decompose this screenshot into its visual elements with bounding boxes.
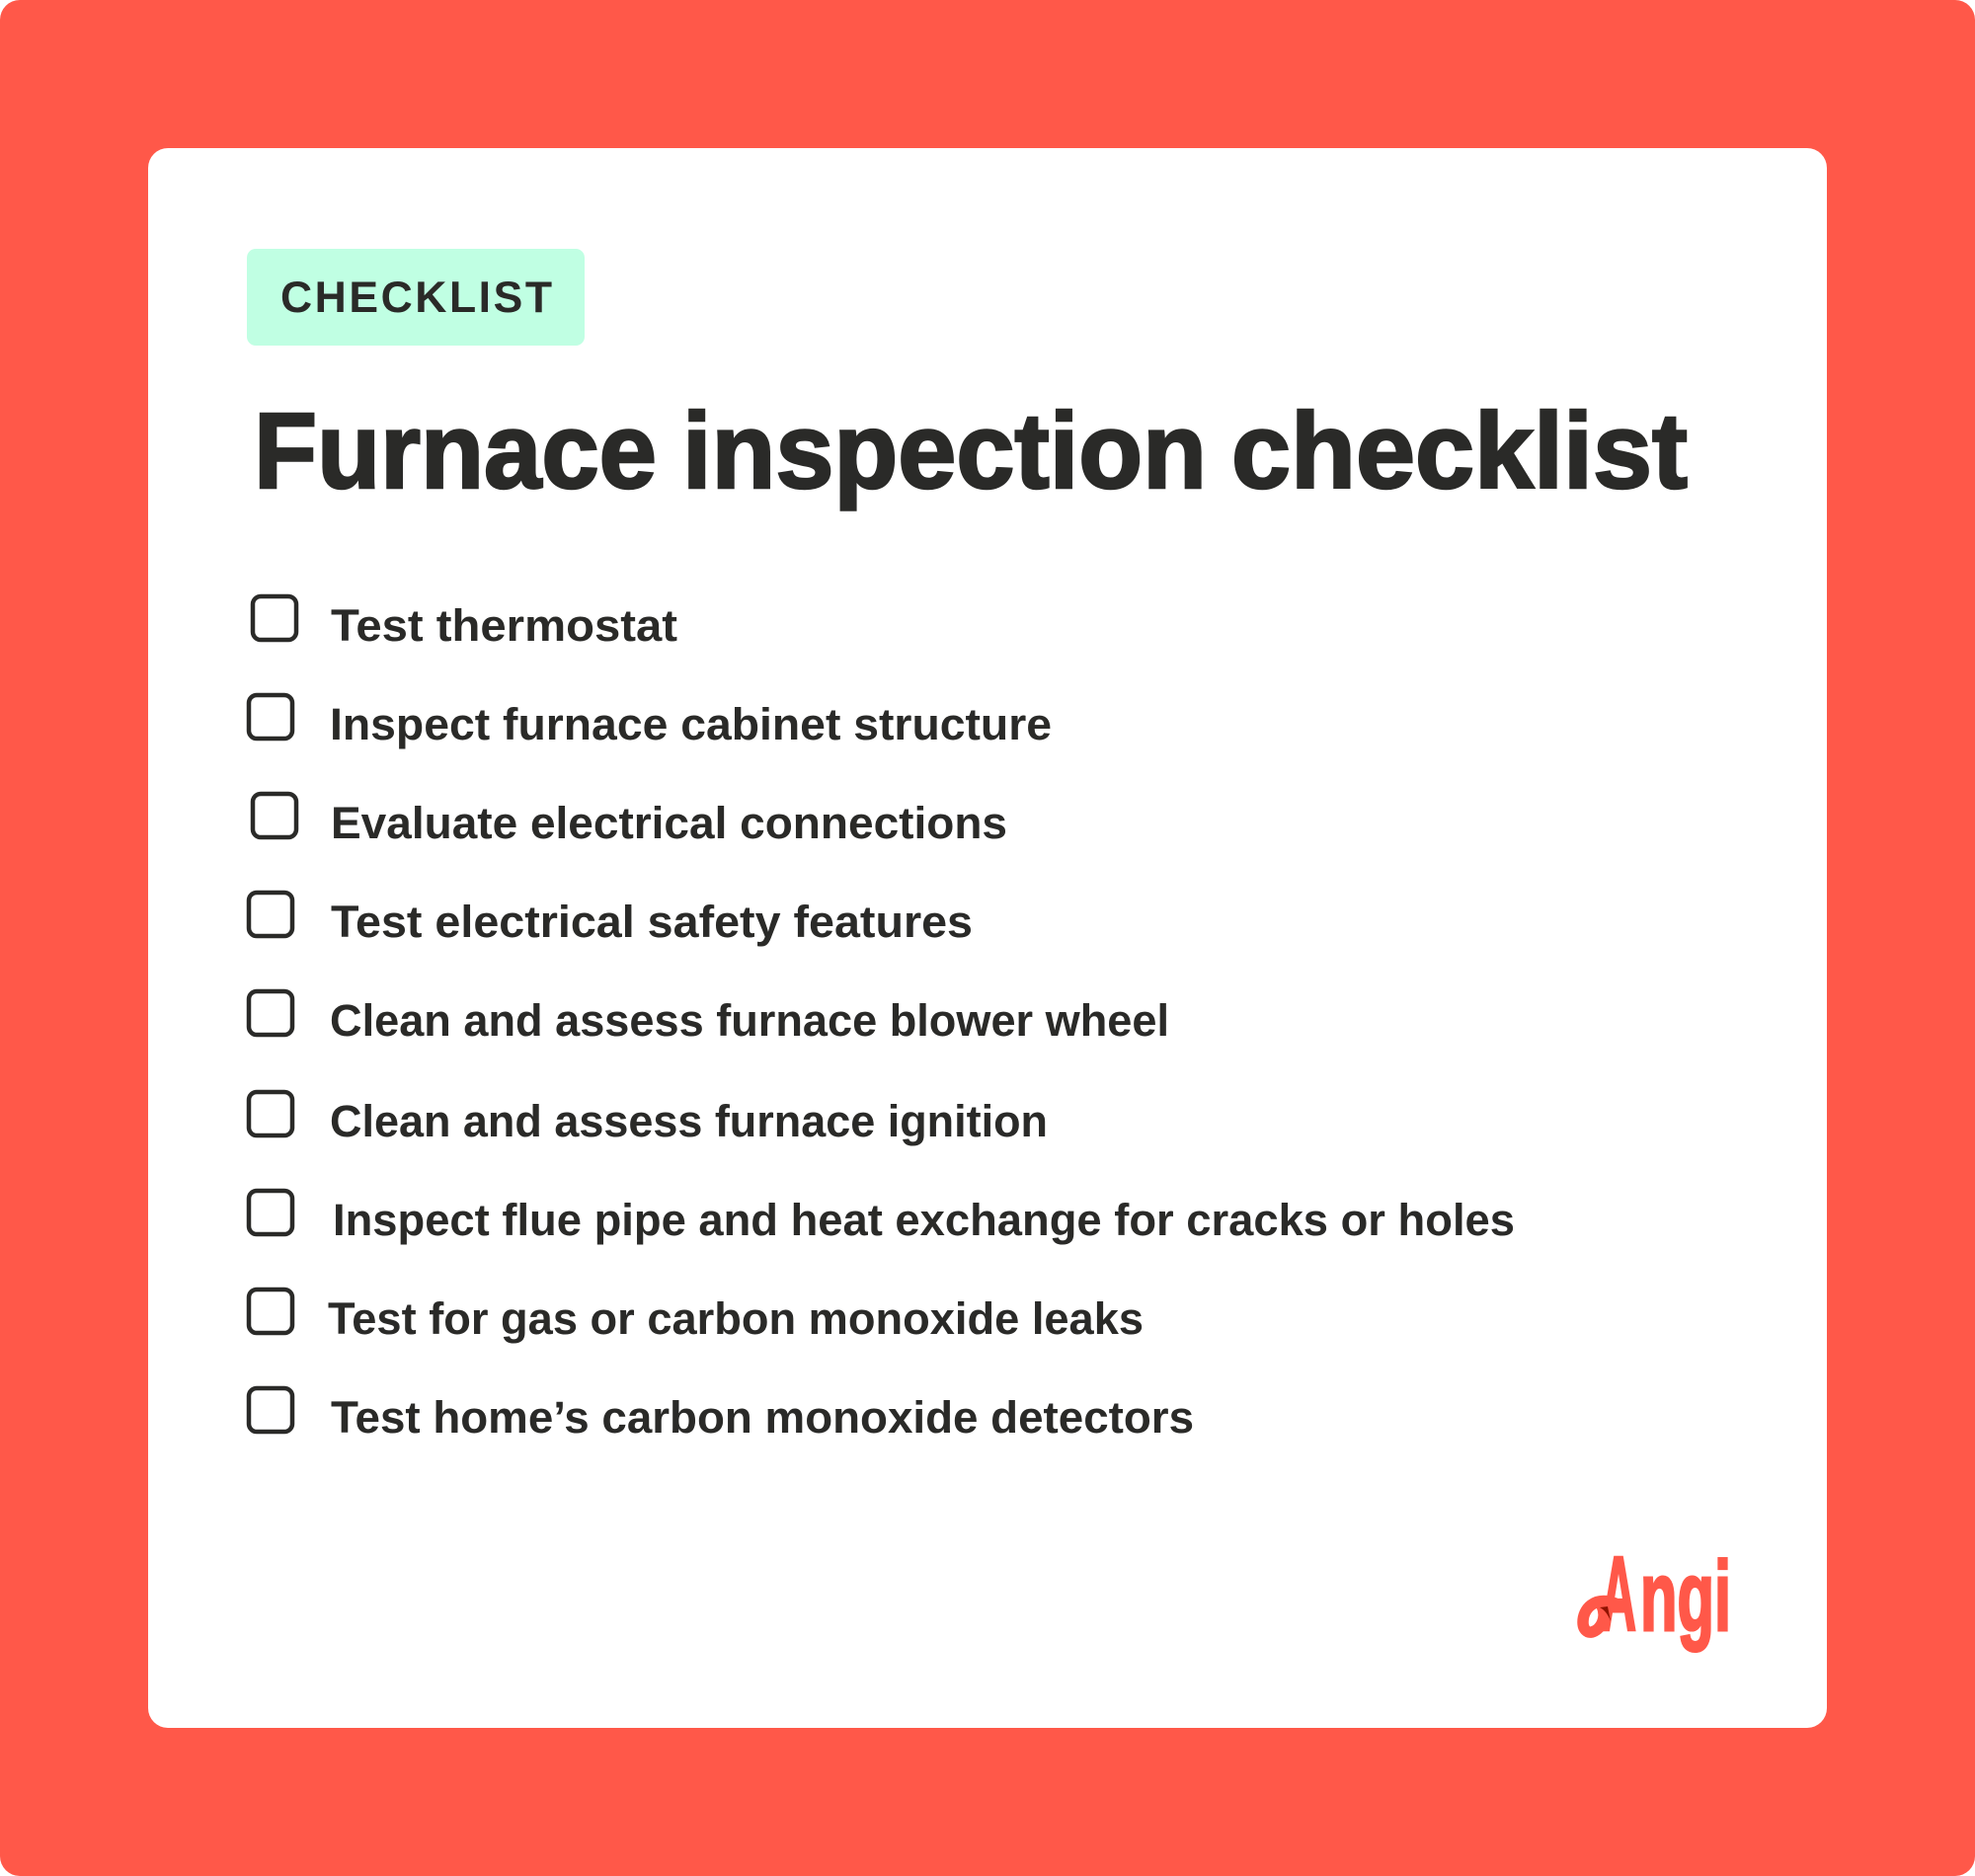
item: test home's carbon monoxide detectors: Test home’s carbon monoxide detectors xyxy=(331,1392,1194,1443)
item: evaluate electrical connections: Evaluate electrical connections xyxy=(331,798,1007,848)
item: test thermostat: Test thermostat xyxy=(331,600,677,651)
logo: Angi xyxy=(1583,1534,1731,1653)
badge: checklist tag: CHECKLIST xyxy=(280,274,552,322)
badge: checklist tag xyxy=(247,249,585,346)
logo: Angi: A xyxy=(1601,1534,1636,1653)
checklist xyxy=(249,596,1515,1443)
item: inspect flue pipe and heat exchange: Inspect flue pipe and heat exchange for cracks or holes xyxy=(333,1195,1515,1245)
item: clean and assess furnace blower wheel: Clean and assess furnace blower wheel xyxy=(330,995,1169,1046)
title xyxy=(254,391,1688,511)
panel: white card xyxy=(148,148,1827,1728)
item: inspect furnace cabinet structure: Inspect furnace cabinet structure xyxy=(330,699,1052,749)
title: inspection xyxy=(682,391,1207,511)
item: clean and assess furnace ignition: Clean and assess furnace ignition xyxy=(330,1096,1048,1146)
title: Furnace xyxy=(254,391,657,511)
logo: Angi: ngi xyxy=(1640,1541,1731,1652)
item: test for gas or carbon monoxide leaks: Test for gas or carbon monoxide leaks xyxy=(328,1293,1144,1344)
item: test electrical safety features: Test electrical safety features xyxy=(331,897,973,947)
title: checklist xyxy=(1231,391,1688,511)
